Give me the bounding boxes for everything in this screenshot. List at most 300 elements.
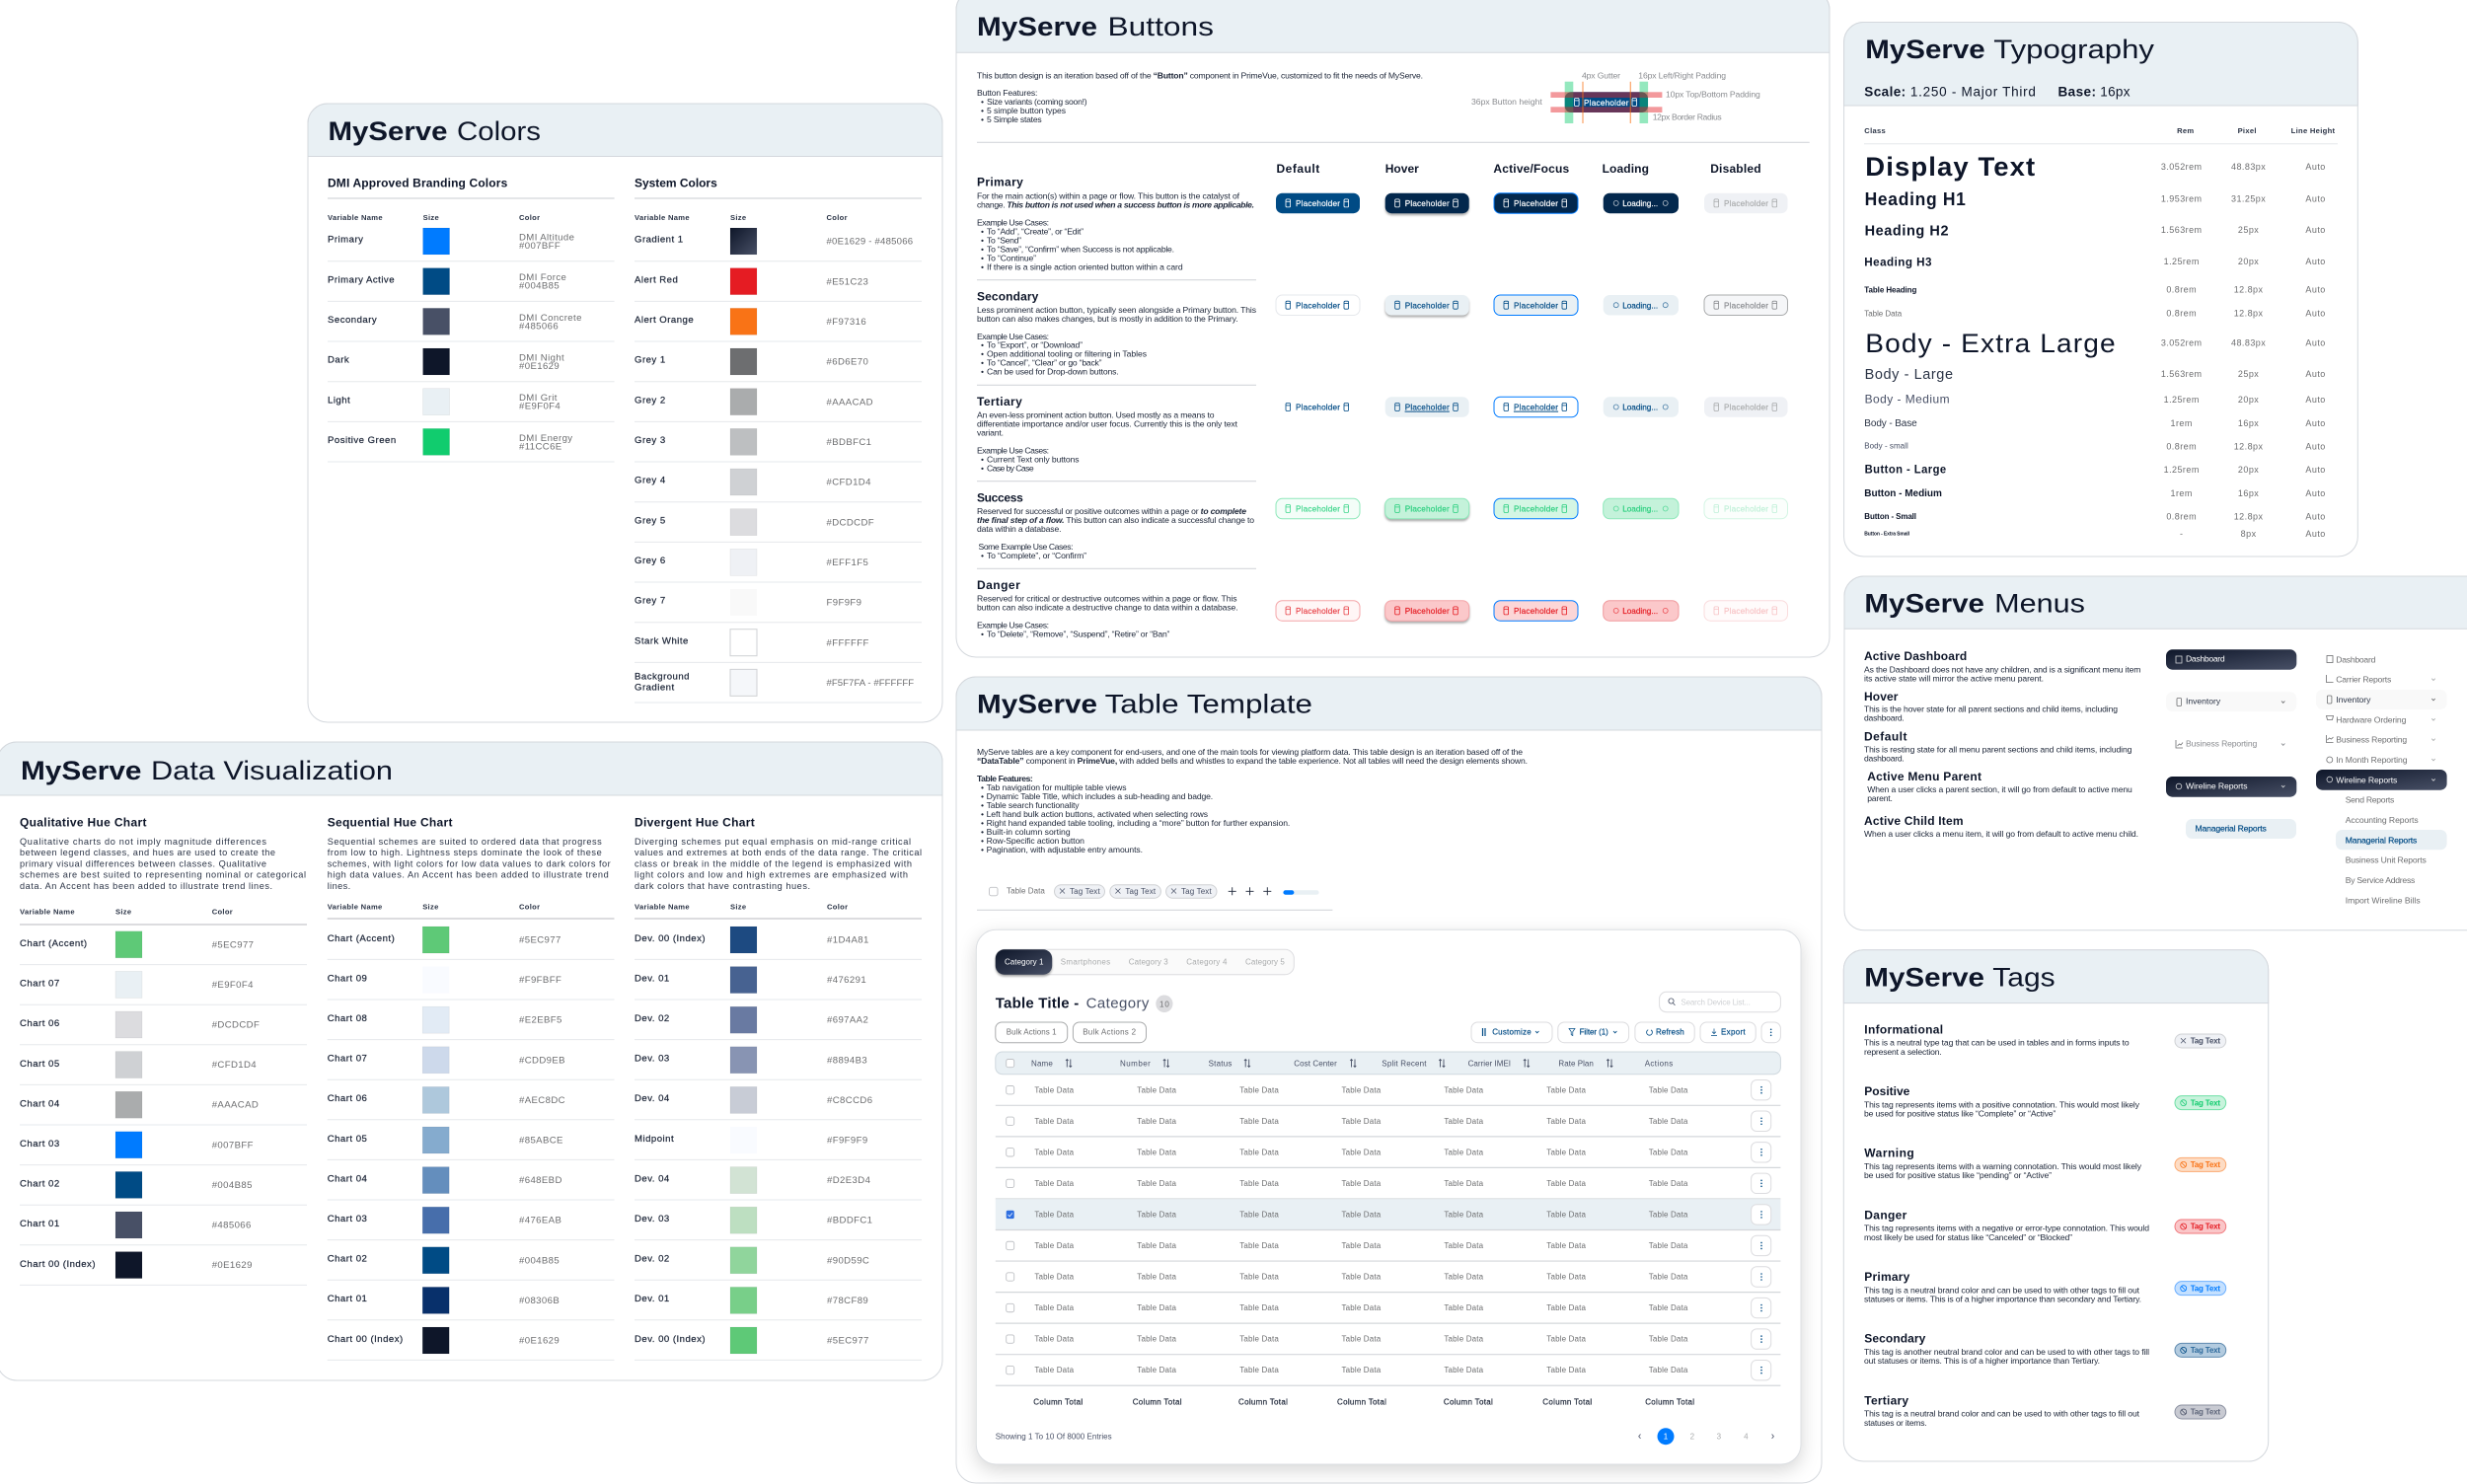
column totals: Column Total	[1238, 1397, 1288, 1406]
type row: Button Extra Small: -	[2180, 529, 2183, 539]
subheading: branding colors: DMI Approved Branding Colors	[328, 177, 508, 190]
text block: active menu parent: parent.	[1867, 793, 1893, 803]
diagram: button spec: 36px Button height	[1471, 97, 1542, 107]
tag row: Tertiary	[1864, 1393, 2226, 1428]
type row: Body Extra Large	[1865, 329, 2326, 358]
text block: danger: To “Delete”, “Remove”, “Suspend”, “Retire” or “Ban”	[987, 630, 1170, 639]
table row 1	[996, 1079, 1780, 1105]
table header row: Status	[1209, 1060, 1233, 1069]
table row 9: Table Data	[1137, 1335, 1177, 1344]
type row: Button Large: 20px	[2238, 465, 2259, 475]
swatch row: Background Gradient: Background	[635, 671, 690, 682]
table row 4: Table Data	[1444, 1179, 1484, 1188]
swatch row: Alert Orange: #F97316	[827, 317, 866, 328]
tag row: Tertiary: This tag is a neutral brand color and can be used to with other tags to fill out	[1864, 1409, 2140, 1419]
swatch row: Background Gradient: #F5F7FA - #FFFFFF	[827, 678, 914, 689]
heading: MyServe Data Visualization: MyServe	[21, 756, 142, 785]
type row: Heading H1: 31.25px	[2231, 194, 2266, 204]
table header: system	[635, 213, 848, 222]
table: qualitative hue chart: Chart 05	[20, 1059, 60, 1070]
panel: MyServe Menus	[1844, 576, 2467, 930]
type row: Heading H1: 1.953rem	[2161, 194, 2203, 204]
tag row: Secondary: Secondary	[1864, 1332, 1926, 1346]
text block: primary: To “Add”, “Create”, or “Edit”	[987, 226, 1084, 236]
text block: table intro and features: MyServe tables are a key component for end-users, and one of the main tools for viewing platform data. This table design is an iteration based off of the	[977, 747, 1523, 757]
table row 9: Table Data	[1444, 1335, 1484, 1344]
swatch row: Background Gradient: Gradient	[635, 682, 675, 693]
swatch row: Positive Green: DMI Energy	[519, 433, 572, 444]
text block: primary: If there is a single action oriented button within a card	[987, 261, 1183, 271]
type row: Button Medium	[1864, 488, 2326, 499]
tabs: Smartphones	[1061, 958, 1110, 967]
sidebar menu example: Send Reports	[2346, 795, 2395, 805]
table row 7: Table Data	[1137, 1273, 1177, 1282]
table row 5: selected: Table Data	[1342, 1211, 1382, 1220]
tag row: Danger: Danger	[1864, 1208, 1907, 1222]
table: divergent hue chart: Dev. 00 (Index)	[635, 933, 706, 944]
swatch row: Grey 2	[635, 389, 922, 421]
table row 3: Table Data	[1546, 1148, 1587, 1156]
table: divergent hue chart: Dev. 02	[635, 1013, 670, 1024]
type row: Heading H3	[1864, 255, 2326, 268]
tag row: Primary: This tag is a neutral brand color and can be used to with other tags to fill out	[1864, 1285, 2140, 1295]
text block: intro and features: •	[981, 114, 984, 124]
text block: danger: button can also indicate a destructive change to data within a database.	[977, 603, 1238, 613]
text block: table intro and features: •	[981, 782, 984, 792]
table row 10: Table Data	[1546, 1366, 1587, 1374]
table row 2: Table Data	[1546, 1117, 1587, 1126]
type row: Body small: 12.8px	[2234, 441, 2264, 451]
table row 7: Table Data	[1546, 1273, 1587, 1282]
sidebar menu example	[2316, 654, 2447, 905]
table row 5: selected: Table Data	[1239, 1211, 1279, 1220]
type row: Button Small	[1864, 511, 2326, 521]
text block: divergent: class or break in the middle of the legend is emphasized with	[635, 858, 912, 868]
text block: active dashboard: its active state will mirror the active menu parent.	[1864, 673, 2044, 683]
swatch row: Background Gradient	[635, 669, 922, 703]
type row: Heading H3: 1.25rem	[2164, 257, 2200, 266]
table: sequential hue chart: Variable Name	[328, 902, 383, 911]
subheading: system colors: System Colors	[635, 177, 717, 190]
table: divergent hue chart: #78CF89	[827, 1296, 868, 1306]
table row 6: Table Data	[1137, 1241, 1177, 1250]
text block: intro and features	[977, 70, 1423, 124]
column headings: button states: Active/Focus	[1493, 162, 1569, 176]
table row 7: Table Data	[1649, 1273, 1688, 1282]
text block: success: •	[981, 551, 984, 560]
table row 8: Table Data	[1649, 1303, 1688, 1312]
type row: Heading H2: 25px	[2238, 225, 2259, 235]
tag row: Informational: Tag Text	[2191, 1037, 2220, 1046]
heading: MyServe Table Template: MyServe	[977, 690, 1097, 719]
swatch row: Grey 6	[635, 549, 922, 582]
text block: secondary: Less prominent action button, typically seen alongside a Primary button. This	[977, 305, 1256, 315]
text block: sequential: from low to high. Lightness steps dominate the look of these	[328, 848, 602, 857]
table: divergent hue chart: #8894B3	[827, 1055, 867, 1066]
type row: Button Large: Button - Large	[1865, 463, 1947, 477]
pagination: 3	[1717, 1433, 1722, 1441]
tag row: Informational	[1864, 1022, 2226, 1057]
table: qualitative hue chart: Chart 01	[20, 1219, 60, 1229]
button row: danger	[1276, 601, 1788, 621]
type row: Table Data: 0.8rem	[2166, 309, 2197, 319]
table: qualitative hue chart: #CFD1D4	[212, 1060, 257, 1071]
table: divergent hue chart: Dev. 03	[635, 1054, 670, 1065]
heading: MyServe Colors: Colors	[457, 116, 541, 146]
tag row: Primary: statuses or items. This is of a higher importance than secondary and Tertiary.	[1864, 1294, 2141, 1303]
swatch row: Grey 6: #EFF1F5	[827, 557, 868, 568]
table: divergent hue chart: Dev. 03	[635, 1214, 670, 1224]
text block: sequential: Sequential schemes are suited to ordered data that progress	[328, 837, 602, 847]
table: qualitative hue chart: Chart 02	[20, 1179, 60, 1190]
swatch row: Primary: #007BFF	[519, 241, 561, 252]
type row: Table Heading: Table Heading	[1864, 285, 1917, 294]
type row: Display Text: 3.052rem	[2161, 162, 2203, 172]
type row: Body Medium: Body - Medium	[1865, 393, 1950, 407]
table: sequential hue chart: #5EC977	[519, 935, 561, 945]
table header: branding: Color	[519, 213, 540, 222]
table header row: Actions	[1645, 1060, 1673, 1069]
table row 9: Table Data	[1239, 1335, 1279, 1344]
text block: primary: To “Send”	[987, 235, 1021, 245]
bulk action buttons	[996, 1022, 1147, 1043]
panel: MyServe Colors	[308, 104, 942, 722]
text block: tertiary: •	[981, 463, 984, 473]
button row: secondary: Placeholder	[1405, 301, 1450, 310]
table row 8: Table Data	[1137, 1303, 1177, 1312]
type row: Heading H2	[1865, 223, 2326, 240]
text block: default: dashboard.	[1864, 753, 1905, 763]
text block: secondary: To “Export”, or “Download”	[987, 340, 1083, 350]
table row 10	[996, 1360, 1780, 1385]
text block: primary	[977, 176, 1254, 271]
table: divergent hue chart: #5EC977	[827, 1336, 869, 1346]
text block: secondary: Open additional tooling or filtering in Tables	[987, 349, 1147, 359]
text block: active menu parent	[1867, 770, 2132, 803]
tag row: Informational: represent a selection.	[1864, 1047, 1942, 1057]
text block: table intro and features: Dynamic Table Title, which includes a sub-heading and badge.	[987, 791, 1213, 801]
component row: cell variants: Table Data	[1007, 887, 1045, 896]
tag row: Positive: Tag Text	[2191, 1098, 2220, 1107]
table row 5: selected: Table Data	[1649, 1211, 1688, 1220]
button row: tertiary: Placeholder	[1405, 404, 1450, 412]
tag row: Informational: Informational	[1864, 1022, 1943, 1036]
text block: table intro and features: •	[981, 845, 984, 854]
swatch row: Primary Active: #004B85	[519, 281, 560, 292]
table row 8: Table Data	[1239, 1303, 1279, 1312]
text block: tertiary	[977, 395, 1238, 473]
scale and base line: Scale:	[1864, 85, 1906, 99]
button row: danger: Loading...	[1622, 607, 1658, 616]
text block: table intro and features: “DataTable” component in PrimeVue, with added bells and whistles to expand the table experience. Not all tables will need the design elements shown.	[977, 756, 1528, 766]
button row: success	[1276, 498, 1788, 519]
type row: Table Data: 12.8px	[2234, 309, 2264, 319]
text block: success: Some Example Use Cases:	[979, 542, 1074, 552]
text block: table intro and features: Row-Specific action button	[987, 836, 1084, 846]
table row 6: Table Data	[1546, 1241, 1587, 1250]
text block: table intro and features: •	[981, 818, 984, 828]
table: divergent hue chart	[635, 902, 922, 1360]
table tools: Filter (1)	[1580, 1028, 1608, 1037]
button row: tertiary	[1286, 397, 1788, 417]
text block: hover: This is the hover state for all parent sections and child items, including	[1864, 705, 2118, 714]
text block: tertiary: Current Text only buttons	[987, 454, 1080, 464]
type row: Heading H3: Auto	[2305, 257, 2326, 266]
text block: table intro and features: •	[981, 827, 984, 837]
table row 5: selected: Table Data	[1137, 1211, 1177, 1220]
heading: MyServe Table Template: Table Template	[1105, 690, 1312, 719]
table: qualitative hue chart: #007BFF	[212, 1140, 254, 1150]
button row: primary	[1276, 193, 1788, 213]
column totals: Column Total	[1033, 1397, 1083, 1406]
swatch row: Dark: #0E1629	[519, 361, 560, 372]
table row 4: Table Data	[1342, 1179, 1382, 1188]
sidebar menu example: Managerial Reports	[2346, 835, 2418, 845]
scale and base line: 1.250 - Major Third	[1910, 85, 2036, 99]
tag row: Danger: This tag represents items with a negative or error-type connotation. This would	[1864, 1224, 2149, 1233]
type row: Body Large	[1865, 366, 2326, 383]
tag row: Warning	[1864, 1147, 2226, 1180]
text block: table intro and features: Built-in column sorting	[987, 827, 1071, 837]
type row: Body Medium: Auto	[2305, 395, 2326, 405]
text block: primary: To “Save”, “Confirm” when Success is not applicable.	[987, 244, 1174, 254]
table: sequential hue chart: Chart 08	[328, 1013, 367, 1024]
heading: MyServe Colors: MyServe	[328, 116, 448, 146]
text block: primary: •	[981, 235, 984, 245]
column totals	[1033, 1397, 1694, 1406]
swatch row: Grey 4: #CFD1D4	[827, 478, 871, 488]
table: qualitative hue chart: Size	[115, 908, 131, 916]
swatch row: Secondary: DMI Concrete	[519, 313, 582, 324]
table: qualitative hue chart: #004B85	[212, 1180, 253, 1191]
swatch row: Grey 3: Grey 3	[635, 435, 666, 446]
table title and badge: Table Title -	[996, 996, 1080, 1012]
type row: Table Data: Auto	[2305, 309, 2326, 319]
table: sequential hue chart: Chart 04	[328, 1173, 368, 1184]
table header: branding: Variable Name	[328, 213, 383, 222]
table title and badge: Category	[1086, 996, 1150, 1012]
type row: Heading H1: Auto	[2305, 194, 2326, 204]
text block: secondary: Example Use Cases:	[977, 332, 1049, 341]
button row: danger: Placeholder	[1514, 607, 1558, 616]
text block: danger: Example Use Cases:	[977, 621, 1049, 631]
text block: table intro and features: Table search functionality	[987, 800, 1080, 810]
heading: MyServe Typography: Typography	[1993, 35, 2155, 64]
table: sequential hue chart: #004B85	[519, 1255, 560, 1266]
table row 4: Table Data	[1034, 1179, 1075, 1188]
text block: qualitative: schemes are best suited to representing nominal or categorical	[20, 870, 306, 880]
table row 10: Table Data	[1649, 1366, 1688, 1374]
type row: Body Extra Large: Auto	[2305, 337, 2326, 347]
table: sequential hue chart: Chart 05	[328, 1134, 367, 1145]
text block: default	[1864, 729, 2132, 763]
text block: tertiary: variant.	[977, 427, 1004, 437]
text block: intro and features: 5 Simple states	[987, 114, 1042, 124]
text block: secondary: •	[981, 340, 984, 350]
table: sequential hue chart: #AEC8DC	[519, 1095, 565, 1106]
swatch row: Light: #E9F0F4	[519, 402, 561, 412]
scale and base line	[1864, 85, 2131, 99]
text block: success: To “Complete”, or “Confirm”	[987, 551, 1086, 560]
swatch row: Grey 5: #DCDCDF	[827, 517, 874, 528]
table: sequential hue chart: Chart 03	[328, 1214, 367, 1224]
text block: hover: Hover	[1864, 690, 1899, 704]
table header: system: Size	[730, 213, 746, 222]
heading: MyServe Data Visualization: Data Visualization	[151, 756, 393, 785]
text block: table intro and features: Tab navigation for multiple table views	[987, 782, 1127, 792]
table row 5: selected: Table Data	[1546, 1211, 1587, 1220]
table card	[976, 929, 1801, 1464]
swatch row: Primary Active: DMI Force	[519, 272, 566, 283]
table row 2: Table Data	[1342, 1117, 1382, 1126]
text block: success: data within a database.	[977, 524, 1062, 534]
table: sequential hue chart: Chart 01	[328, 1294, 367, 1304]
sidebar menu example: Inventory	[2336, 695, 2371, 705]
heading: MyServe Menus: Menus	[1994, 589, 2085, 619]
scale and base line: Base:	[2058, 85, 2096, 99]
type row: Button Large: Auto	[2305, 465, 2326, 475]
text block: success: Reserved for successful or positive outcomes within a page or to complete	[977, 506, 1246, 516]
text block: primary: •	[981, 261, 984, 271]
table row 2	[996, 1111, 1780, 1137]
table: qualitative hue chart: Chart 07	[20, 979, 60, 990]
swatch row: Gradient 1: #0E1629 - #485066	[827, 237, 914, 248]
table row 7: Table Data	[1444, 1273, 1484, 1282]
text block: intro and features: Size variants (coming soon!)	[987, 97, 1087, 107]
swatch row: Secondary: Secondary	[328, 315, 377, 326]
swatch row: Dark	[328, 348, 615, 382]
tabs: Category 3	[1129, 958, 1168, 967]
sidebar menu example: Hardware Ordering	[2336, 714, 2407, 724]
column headings: button states: Disabled	[1710, 162, 1761, 176]
tabs: Category 5	[1245, 958, 1285, 967]
table header row: Carrier IMEI	[1468, 1060, 1511, 1069]
swatch row: Secondary	[328, 308, 615, 341]
button row: success: Placeholder	[1405, 505, 1450, 514]
type row: Body Extra Large: 48.83px	[2231, 337, 2266, 347]
type row: Button Medium: 16px	[2238, 488, 2259, 498]
swatch row: Stark White	[635, 630, 922, 662]
tag row: Tertiary: Tertiary	[1864, 1393, 1908, 1407]
table row 10: Table Data	[1342, 1366, 1382, 1374]
table: qualitative hue chart: Color	[212, 908, 233, 916]
type row: Table Heading: 0.8rem	[2166, 284, 2197, 294]
diagram: button spec: 4px Gutter	[1582, 70, 1620, 80]
text block: secondary: •	[981, 358, 984, 368]
text block: divergent	[635, 816, 922, 891]
type row: Body small	[1864, 441, 2326, 451]
type row: Button Extra Small: 8px	[2241, 529, 2257, 539]
text block: active menu parent: When a user clicks a parent section, it will go from default to active menu	[1867, 784, 2132, 794]
tag row: Secondary: Tag Text	[2191, 1346, 2220, 1355]
table: sequential hue chart: Color	[519, 902, 540, 911]
button row: tertiary: Placeholder	[1724, 404, 1768, 412]
button row: success: Loading...	[1622, 505, 1658, 514]
text block: success: the final step of a flow. This button can also indicate a successful change to	[977, 515, 1254, 525]
swatch row: Primary Active: Primary Active	[328, 274, 395, 285]
text block: active dashboard	[1864, 649, 2140, 683]
heading: MyServe Menus: MyServe	[1864, 589, 1984, 619]
table header: system: Variable Name	[635, 213, 690, 222]
menu sample: managerial active child: Managerial Reports	[2195, 823, 2267, 833]
text block: active child item	[1864, 814, 2138, 839]
type table header	[1864, 126, 2336, 135]
type row: Button Medium: 1rem	[2171, 488, 2193, 498]
table: divergent hue chart: Midpoint	[635, 1134, 674, 1145]
tabs: Category 1	[1005, 958, 1044, 967]
table row 1: Table Data	[1137, 1085, 1177, 1094]
table row 6: Table Data	[1342, 1241, 1382, 1250]
panel: MyServe Buttons	[956, 0, 1830, 657]
button row: tertiary: Loading...	[1622, 404, 1658, 412]
table: sequential hue chart: Chart 00 (Index)	[328, 1334, 404, 1345]
swatch row: Dark: DMI Night	[519, 353, 564, 363]
text block: secondary: Can be used for Drop-down buttons.	[987, 367, 1119, 377]
table header row: Number	[1120, 1060, 1151, 1069]
button row: primary: Placeholder	[1405, 199, 1450, 208]
swatch row: Light	[328, 389, 615, 421]
button row: secondary: Placeholder	[1296, 301, 1340, 310]
text block: primary: •	[981, 244, 984, 254]
type table header: Class	[1864, 126, 1886, 135]
swatch row: Grey 6: Grey 6	[635, 556, 666, 566]
sidebar menu example: In Month Reporting	[2336, 755, 2408, 765]
tag row: Secondary	[1864, 1332, 2226, 1366]
table: qualitative hue chart: Chart (Accent)	[20, 938, 88, 949]
heading: MyServe Buttons	[977, 12, 1214, 41]
type row: Body Base: 16px	[2238, 418, 2259, 428]
table row 2: Table Data	[1239, 1117, 1279, 1126]
swatch row: Grey 3	[635, 428, 922, 462]
type row: Body Large: 25px	[2238, 369, 2259, 379]
table row 2: Table Data	[1444, 1117, 1484, 1126]
type row: Heading H1: Heading H1	[1865, 188, 1967, 209]
button row: success: Placeholder	[1296, 505, 1340, 514]
table row 5: selected	[996, 1199, 1780, 1229]
sidebar menu example: Accounting Reports	[2346, 815, 2419, 825]
text block: tertiary: Tertiary	[977, 395, 1022, 408]
swatch row: Grey 7	[635, 589, 922, 623]
text block: danger	[977, 578, 1238, 639]
table title and badge	[996, 995, 1172, 1012]
type row: Body Medium: 20px	[2238, 395, 2259, 405]
tag row: Positive: This tag represents items with a positive connotation. This would most likely	[1864, 1099, 2140, 1109]
table: divergent hue chart: #D2E3D4	[827, 1175, 871, 1186]
component row: cell variants: Tag Text	[1070, 887, 1100, 896]
tag row: Secondary: This tag is another neutral brand color and can be used to with other tags to fill	[1864, 1347, 2149, 1357]
component row: cell variants	[989, 885, 1319, 898]
table: sequential hue chart: Chart (Accent)	[328, 933, 395, 944]
swatch row: Grey 1	[635, 348, 922, 382]
text block: table intro and features: •	[981, 836, 984, 846]
button row: secondary: Placeholder	[1724, 301, 1768, 310]
type row: Button Extra Small	[1864, 529, 2326, 539]
table header: branding	[328, 213, 540, 222]
text block: table intro and features	[977, 747, 1528, 854]
table: divergent hue chart: Dev. 00 (Index)	[635, 1334, 706, 1345]
table: sequential hue chart: #CDD9EB	[519, 1055, 565, 1066]
table: divergent hue chart: Color	[827, 902, 848, 911]
menu sample: business reporting default	[2176, 739, 2284, 749]
table row 6: Table Data	[1649, 1241, 1688, 1250]
text block: sequential: high data values. An Accent has been added to illustrate trend	[328, 870, 609, 880]
entries count: Showing 1 To 10 Of 8000 Entries	[996, 1432, 1112, 1441]
swatch row: Grey 7: F9F9F9	[827, 598, 861, 609]
heading: MyServe Tags	[1864, 963, 2056, 993]
table: qualitative hue chart: Chart 00 (Index)	[20, 1259, 96, 1270]
type row: Body Base: Auto	[2305, 418, 2326, 428]
text block: qualitative	[20, 816, 306, 891]
